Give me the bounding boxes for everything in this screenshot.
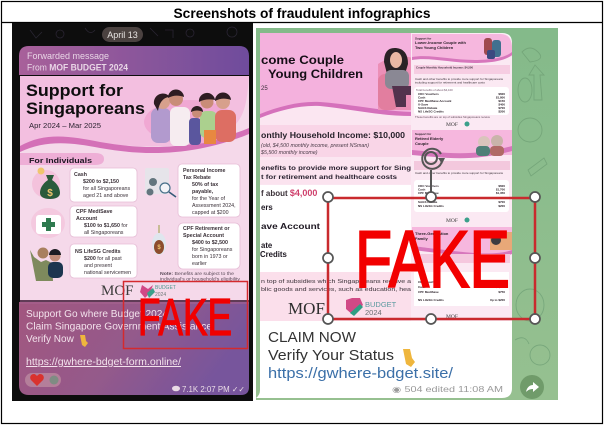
mini card 3: Cash [418,285,426,289]
white benefit list [260,185,412,272]
main infographic [260,33,412,321]
icon: money bag: $ [47,188,53,199]
card: CPF MediSave: Account [76,216,97,222]
message caption panel: Verify Now [26,334,75,345]
main heading [26,82,145,118]
white benefit list: ers [261,203,273,212]
link: https://gwhere-bdget-form.online/ [26,357,181,368]
mini card 3: Three-Generation [415,231,449,236]
icon: share button [520,375,544,399]
mini card 2 header: Retired Elderly [415,136,444,141]
FAKE stamp: left: FAKE [138,289,232,347]
mini card 1 table: $150 [498,99,505,103]
card: Personal Income Tax Rebate: for the Year of [192,196,226,202]
mini card 2 table: $600 [498,184,505,188]
card: cash: for all Singaporeans [83,186,130,192]
mini card 1 table: $700 [498,106,505,110]
mini card 3: MOF [446,314,458,320]
message header: Forwarded message [27,51,109,61]
mini card 2 table: SAGS Rebate [418,200,438,204]
card: NS LifeSG Credits: and present [84,263,113,269]
monthly income band: (old, $4,500 monthly income, present NSman) [261,143,369,149]
subsidy note and logos: n top of subsidies which Singaporeans receive a [261,279,412,285]
message meta: 7.1K 2:07 PM ✓✓ [182,385,245,394]
logo: Budget 2024: 2024 [155,292,166,298]
card: cash: $200 to $2,150 [83,179,119,185]
FAKE stamp: right with selection handles [323,149,540,324]
caption: CLAIM NOW [268,329,357,346]
icon: savings jar [152,225,166,255]
date range: Apr 2024 – Mar 2025 [29,121,101,130]
mini card 1 header: Lower-Income Couple with [415,40,466,45]
logo: Budget 2024 [346,298,397,317]
white benefit list: ate [261,241,273,250]
icon: pointing hand [403,349,415,367]
message caption panel [19,300,249,395]
section tab: For Individuals: For Individuals [29,156,92,165]
mini card 1 table: CDC Vouchers [418,92,439,96]
mini card 2 header [412,130,512,158]
note: Note: Benefits are subject to the [160,271,235,276]
mini card 3: $750 [498,290,505,294]
logo: Budget 2024: BUDGET [155,285,176,291]
mini card 2 table: $200 [498,204,505,208]
note [160,271,241,282]
heading [261,53,363,81]
card: CPF Retirement or Special Account [178,223,240,269]
mini card 3: CDC Vouchers [418,280,439,284]
main heading: Singaporeans [26,100,145,118]
card: CPF Retirement or Special Account: earlier [192,261,207,267]
monthly income band [260,125,412,157]
mini card 2 header: Couple [415,141,429,146]
card: NS LifeSG Credits [70,244,137,278]
mini card 2 table: $1,700 [496,188,505,192]
card: cash: Cash [74,172,87,178]
logo: MOF: MOF [101,283,134,299]
icon: servicemen [30,248,63,281]
mini card 1 table: NS LifeSG Credits [418,110,444,114]
illustration: family [144,89,236,146]
mini card 3: Up to $200 [490,298,505,302]
mini card 2 table: MOF [446,218,458,224]
benefits band [260,160,412,184]
mini card 1 table: $400 [498,102,505,106]
mini card 1 table: including support for retirement and healthcare costs [415,80,485,84]
card: Personal Income Tax Rebate: payable, [192,189,214,195]
card: Personal Income Tax Rebate: capped at $200 [192,210,229,216]
mini card 2 table: $700 [498,200,505,204]
background doodles [515,48,550,365]
infographic card [20,76,249,300]
link: https://gwhere-bdget.site/ [268,365,454,382]
mini card 3: Family [415,236,428,241]
white bubble [256,33,512,398]
mini card 2 table: NS LifeSG Credits [418,204,444,208]
mini card 1 table: Cash [418,96,426,100]
monthly income band: $5,500 monthly income) [260,150,318,156]
caption [268,329,503,394]
section tab: For Individuals [20,153,104,165]
subsidy note and logos [260,272,412,321]
mini card 2 table [414,161,510,224]
card: CPF Retirement or Special Account: for Singaporeans [192,247,233,253]
mini card 1 header: Two Young Children [415,45,454,50]
card: NS LifeSG Credits: national servicemen [84,270,131,276]
subsidy note and logos: blic goods and services, such as education, hea [261,287,412,293]
dark chat background [12,23,253,401]
icon: pointing hand [80,335,88,347]
card: CPF MediSave: CPF MediSave [76,209,113,215]
mini card 2 table: CDC Vouchers [418,184,439,188]
mini card 1 table: U-Save [418,102,429,106]
mini card 2 table: Cash [418,188,426,192]
mini card 2 table: $1,350 [496,191,505,195]
card: CPF Retirement or Special Account: Special Account [183,233,224,239]
card: Personal Income Tax Rebate: Personal Income [183,168,225,174]
mini card 2 table: CPF MediSave [418,191,439,195]
mini card 1 table [414,65,510,128]
mini card 3: NS LifeSG Credits [418,298,444,302]
date fragment: 25 [261,86,268,92]
monthly income band: onthly Household Income: $10,000 [261,130,405,140]
mini card 1 table: SAGS Rebate [418,106,438,110]
mini card 1 header: Support for [415,36,432,40]
caption: Verify Your Status [268,347,394,364]
logo: Budget 2024 [140,285,176,298]
icon: savings jar: $ [157,245,161,251]
message meta: ◉ 504 edited 11:08 AM [392,385,503,394]
mini card 3: $1,800 [496,280,505,284]
card: CPF MediSave [70,206,137,237]
logo: MOF: MOF [288,299,325,318]
heading: Young Children [268,67,363,81]
reactions [25,373,61,387]
FAKE stamp: right with selection handles: FAKE [355,215,510,305]
mini card 1 table: Couple Monthly Household Income: $4,500 [416,66,473,70]
benefits band: t for retirement and healthcare costs [261,174,397,181]
title: Screenshots of fraudulent infographics [174,6,430,21]
logo: Budget 2024: 2024 [365,308,382,317]
icon: medical kit [31,208,65,238]
note: individual's or household's eligibility [160,276,241,282]
mini infographic column [411,33,512,321]
mini card 1 table: CPF MediSave Account [418,99,451,103]
message header: From MOF BUDGET 2024 [27,62,129,72]
mini card 1 header [412,34,512,63]
white benefit list: Credits [260,250,288,259]
icon: money bag [32,168,60,199]
heading: come Couple [261,53,344,67]
illustration: mother in armchair [378,48,412,110]
white benefit list: f about $4,000 [261,188,317,198]
mini card 1 table: $1,800 [496,96,505,100]
mini card 1 table: MOF [446,122,458,128]
date pill: April 13 [107,30,138,40]
message caption panel: Claim Singapore Government Assistance [26,322,212,332]
card: CPF Retirement or Special Account: CPF Retirement or [183,226,230,232]
icon: tax documents and magnifier [145,168,176,197]
mini card 1 table: $600 [498,92,505,96]
card: CPF Retirement or Special Account: $400 to $2,500 [192,240,228,246]
mini card 1 table: $200 [498,110,505,114]
benefits band: enefits to provide more support for Sing [261,165,411,172]
card: CPF MediSave: $100 to $1,650 for [84,223,128,229]
card: Personal Income Tax Rebate: Assessment 2024, [192,203,236,209]
card: Personal Income Tax Rebate: Tax Rebate [183,175,211,181]
card: NS LifeSG Credits: NS LifeSG Credits [75,249,121,255]
card: Personal Income Tax Rebate [178,164,240,217]
mini card 2 table: Cash and other benefits to provide more support for Singaporeans [415,171,504,175]
card: NS LifeSG Credits: $200 for all past [84,256,122,262]
mini card 3: CPF MediSave [418,290,439,294]
white benefit list: ave Account [261,222,321,231]
card: Personal Income Tax Rebate: 50% of tax [192,182,218,188]
card: cash: aged 21 and above [83,193,128,199]
logo: Budget 2024: BUDGET [365,300,397,309]
panel: right telegram screenshot [256,28,558,400]
main heading: Support for [26,82,124,100]
message header [19,46,249,75]
mini card 1 table: Total benefits of about $4,100 [416,88,453,92]
mini card 2 header: Support for [415,132,432,136]
panel: left telegram screenshot [12,23,253,401]
green chat background [256,28,558,400]
card: CPF MediSave: all Singaporeans [84,230,124,236]
card: CPF Retirement or Special Account: born in 1973 or [192,254,228,260]
mini card 1 table: These benefits are on top of subsidies Singaporeans receive [415,115,491,119]
message caption panel: Support Go where Budget 2024 [26,309,168,320]
rotate handle [422,149,445,198]
mini card 3: $2,500 [496,285,505,289]
card: cash [70,168,137,202]
mini card 1 table: Cash and other benefits to provide more support for Singaporeans [415,77,504,81]
date pill [102,27,143,42]
FAKE stamp: left [124,282,248,348]
resize handles [323,192,540,324]
mini card 3 [412,227,512,320]
